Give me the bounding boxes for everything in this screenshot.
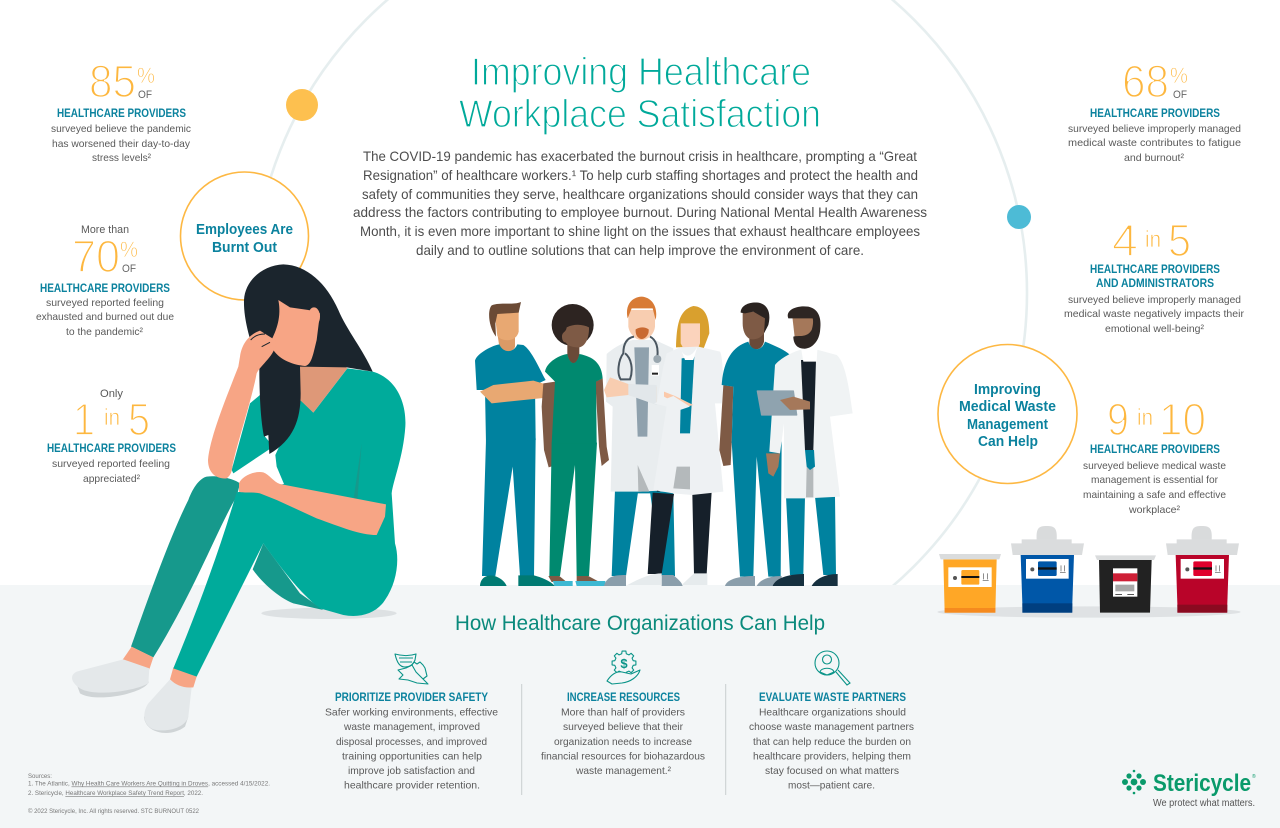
callout: improving medical waste management: Improving (974, 382, 1041, 398)
illustration: healthcare team (475, 297, 853, 586)
back thigh (253, 543, 323, 610)
stat: only 1 in 5 (47, 388, 176, 485)
container shadow (937, 606, 1241, 618)
stat: 4 in 5: 4 (1112, 215, 1138, 266)
raised arm and hand (208, 331, 275, 478)
illustration: sharps containers (937, 526, 1241, 618)
stat: 4 in 5: surveyed believe improperly managed (1068, 295, 1241, 306)
yellow dot (286, 89, 318, 121)
intro paragraph: daily and to outline solutions that can help improve the environment of care. (416, 243, 864, 258)
stat: 68 percent: % (1170, 63, 1188, 88)
finger lines (251, 334, 270, 347)
title: Improving Healthcare (471, 51, 811, 94)
icon: dollar gear and hand (607, 651, 640, 684)
stat: more than 70 percent: More than (81, 224, 129, 236)
stat: 68 percent: surveyed believe improperly managed (1068, 124, 1241, 135)
intro paragraph: Month, it is even more important to shine light on the issues that exhaust healthcare employees (360, 224, 920, 239)
person 5 (719, 302, 790, 586)
stat: 85 percent: % (137, 63, 155, 88)
column: evaluate waste partners: Healthcare organizations should (759, 708, 906, 718)
stat: 4 in 5: AND ADMINISTRATORS (1096, 278, 1214, 290)
shoes (72, 659, 192, 733)
stat: 9 in 10: surveyed believe medical waste (1083, 461, 1226, 472)
stat: 68 percent: OF (1173, 89, 1187, 101)
stat: 4 in 5: emotional well-being² (1105, 324, 1205, 335)
sources (28, 774, 270, 815)
stat: 85 percent: surveyed believe the pandemic (51, 124, 191, 135)
stat: only 1 in 5: 5 (128, 394, 150, 445)
stat: only 1 in 5: in (104, 404, 120, 430)
column: increase resources: INCREASE RESOURCES (567, 692, 680, 704)
icon: magnified person (815, 651, 850, 685)
sources: 1. The Atlantic, Why Health Care Workers Are Quitting in Droves , accessed 4/15/2022. (28, 782, 270, 788)
column: evaluate waste partners: that can help reduce the burden on (753, 737, 911, 748)
stat: 68 percent (1068, 56, 1241, 164)
stat: 68 percent: 68 (1122, 56, 1169, 107)
background arc (253, 0, 1027, 680)
ankles (122, 647, 197, 688)
person 6 (757, 306, 853, 586)
stat: 85 percent: 85 (89, 56, 136, 107)
sources: © 2022 Stericycle, Inc. All rights reserved. STC BURNOUT 0522 (28, 808, 200, 815)
logo: stericycle: ® (1252, 773, 1256, 780)
stat: only 1 in 5: appreciated² (83, 474, 141, 485)
stat: 85 percent: has worsened their day-to-day (52, 139, 191, 150)
stat: 9 in 10: maintaining a safe and effective (1083, 490, 1226, 501)
column: increase resources: More than half of providers (561, 708, 685, 718)
column: prioritize provider safety: Safer working environments, effective (325, 708, 498, 718)
back leg (131, 476, 240, 657)
stat: 9 in 10: workplace² (1128, 505, 1181, 516)
column: evaluate waste partners: healthcare providers, helping them (753, 752, 911, 762)
stat: more than 70 percent (36, 224, 174, 338)
column: evaluate waste partners: choose waste management partners (749, 722, 914, 733)
face (271, 300, 320, 366)
ear (308, 307, 320, 326)
red container (1166, 526, 1239, 613)
stat: more than 70 percent: % (120, 237, 138, 262)
torso and front leg (173, 368, 405, 677)
callout: employees are burnt out (180, 172, 308, 300)
logo: stericycle: We protect what matters. (1153, 798, 1255, 809)
stat: only 1 in 5: surveyed reported feeling (52, 459, 170, 470)
column: increase resources: organization needs to increase (554, 737, 692, 748)
person 2 (542, 304, 609, 586)
column: prioritize provider safety: waste management, improved (343, 722, 480, 733)
column: increase resources: financial resources for biohazardous (541, 752, 705, 762)
stat: 4 in 5: HEALTHCARE PROVIDERS (1090, 264, 1220, 276)
column: evaluate waste partners: most—patient care. (788, 780, 875, 792)
logo: stericycle: Stericycle (1153, 770, 1251, 797)
stat: more than 70 percent: to the pandemic² (66, 327, 144, 338)
callout: improving medical waste management (938, 344, 1077, 484)
sources: Sources: (28, 774, 52, 780)
stat: 85 percent: stress levels² (92, 153, 152, 164)
stat: more than 70 percent: 70 (72, 231, 120, 282)
column: prioritize provider safety: improve job satisfaction and (348, 766, 475, 777)
stat: 4 in 5: in (1145, 226, 1161, 252)
hair (244, 264, 373, 454)
blue container (1011, 526, 1084, 613)
stat: 9 in 10 (1083, 394, 1226, 516)
stat: only 1 in 5: 1 (73, 394, 95, 445)
stat: 68 percent: and burnout² (1124, 153, 1185, 164)
callout: employees are burnt out: Employees Are (196, 222, 293, 238)
callout: improving medical waste management: Management (967, 417, 1048, 433)
intro paragraph: address the factors contributing to employee burnout. During National Mental Health Awareness (353, 205, 927, 220)
orange container (939, 554, 1001, 613)
column: prioritize provider safety (325, 692, 498, 792)
stat: 4 in 5 (1064, 215, 1245, 335)
column: increase resources: waste management.² (575, 766, 672, 777)
stat: 4 in 5: 5 (1168, 215, 1191, 266)
column: evaluate waste partners (749, 692, 914, 792)
column: evaluate waste partners: EVALUATE WASTE PARTNERS (759, 692, 906, 704)
callout: employees are burnt out: Burnt Out (212, 240, 277, 256)
blue dot (1007, 205, 1031, 229)
icon: dollar gear and hand: $ (620, 656, 628, 671)
person 3 (604, 297, 683, 586)
title (459, 51, 821, 136)
stat: 9 in 10: 9 (1107, 394, 1129, 445)
sleeve crease (353, 443, 362, 501)
column: prioritize provider safety: PRIORITIZE PROVIDER SAFETY (335, 692, 488, 704)
column: increase resources (541, 692, 705, 777)
stat: 9 in 10: 10 (1159, 394, 1206, 445)
stat: more than 70 percent: surveyed reported feeling (46, 298, 164, 309)
icon: mask and gloves (395, 654, 428, 684)
person 1 (475, 302, 555, 586)
stat: 85 percent: HEALTHCARE PROVIDERS (57, 108, 186, 120)
floor band (0, 585, 1280, 828)
stat: 85 percent: OF (138, 89, 152, 101)
resting arm (239, 472, 386, 535)
stat: 9 in 10: management is essential for (1091, 475, 1219, 486)
callout: improving medical waste management: Can Help (978, 434, 1038, 450)
raised sleeve (232, 395, 273, 473)
neck and chest (293, 340, 347, 413)
callout: improving medical waste management: Medical Waste (959, 399, 1056, 415)
person 4 (627, 306, 723, 585)
intro paragraph: safety of communities they serve, healthcare organizations should consider ways that they can (362, 187, 918, 202)
logo mark (1122, 770, 1146, 794)
stat: 4 in 5: medical waste negatively impacts their (1064, 309, 1245, 320)
column: increase resources: surveyed believe that their (563, 722, 684, 733)
intro paragraph: Resignation” of healthcare workers.¹ To help curb staffing shortages and protect the health and (363, 168, 918, 183)
section heading: How Healthcare Organizations Can Help (455, 612, 825, 635)
illustration: burnt out nurse (72, 264, 405, 733)
title: Workplace Satisfaction (459, 93, 821, 136)
intro paragraph (353, 149, 927, 258)
stat: more than 70 percent: OF (122, 263, 136, 275)
logo: stericycle (1122, 770, 1256, 809)
floor shadow (261, 608, 397, 619)
stat: 9 in 10: HEALTHCARE PROVIDERS (1090, 444, 1220, 456)
stat: 9 in 10: in (1137, 404, 1153, 430)
column: evaluate waste partners: stay focused on what matters (765, 766, 899, 777)
intro paragraph: The COVID-19 pandemic has exacerbated the burnout crisis in healthcare, prompting a “Great (363, 149, 917, 164)
stat: 68 percent: HEALTHCARE PROVIDERS (1090, 108, 1220, 120)
stat: 85 percent (51, 56, 191, 164)
black container (1095, 555, 1156, 613)
stat: more than 70 percent: HEALTHCARE PROVIDERS (40, 283, 170, 295)
column: prioritize provider safety: healthcare provider retention. (344, 780, 480, 792)
column: prioritize provider safety: training opportunities can help (342, 752, 482, 762)
stat: only 1 in 5: HEALTHCARE PROVIDERS (47, 443, 176, 455)
sources: 2. Stericycle, Healthcare Workplace Safety Trend Report , 2022. (28, 791, 203, 797)
stat: only 1 in 5: Only (100, 388, 124, 400)
column: prioritize provider safety: disposal processes, and improved (336, 737, 487, 748)
stat: 68 percent: medical waste contributes to fatigue (1068, 138, 1241, 149)
stat: more than 70 percent: exhausted and burned out due (36, 312, 174, 323)
